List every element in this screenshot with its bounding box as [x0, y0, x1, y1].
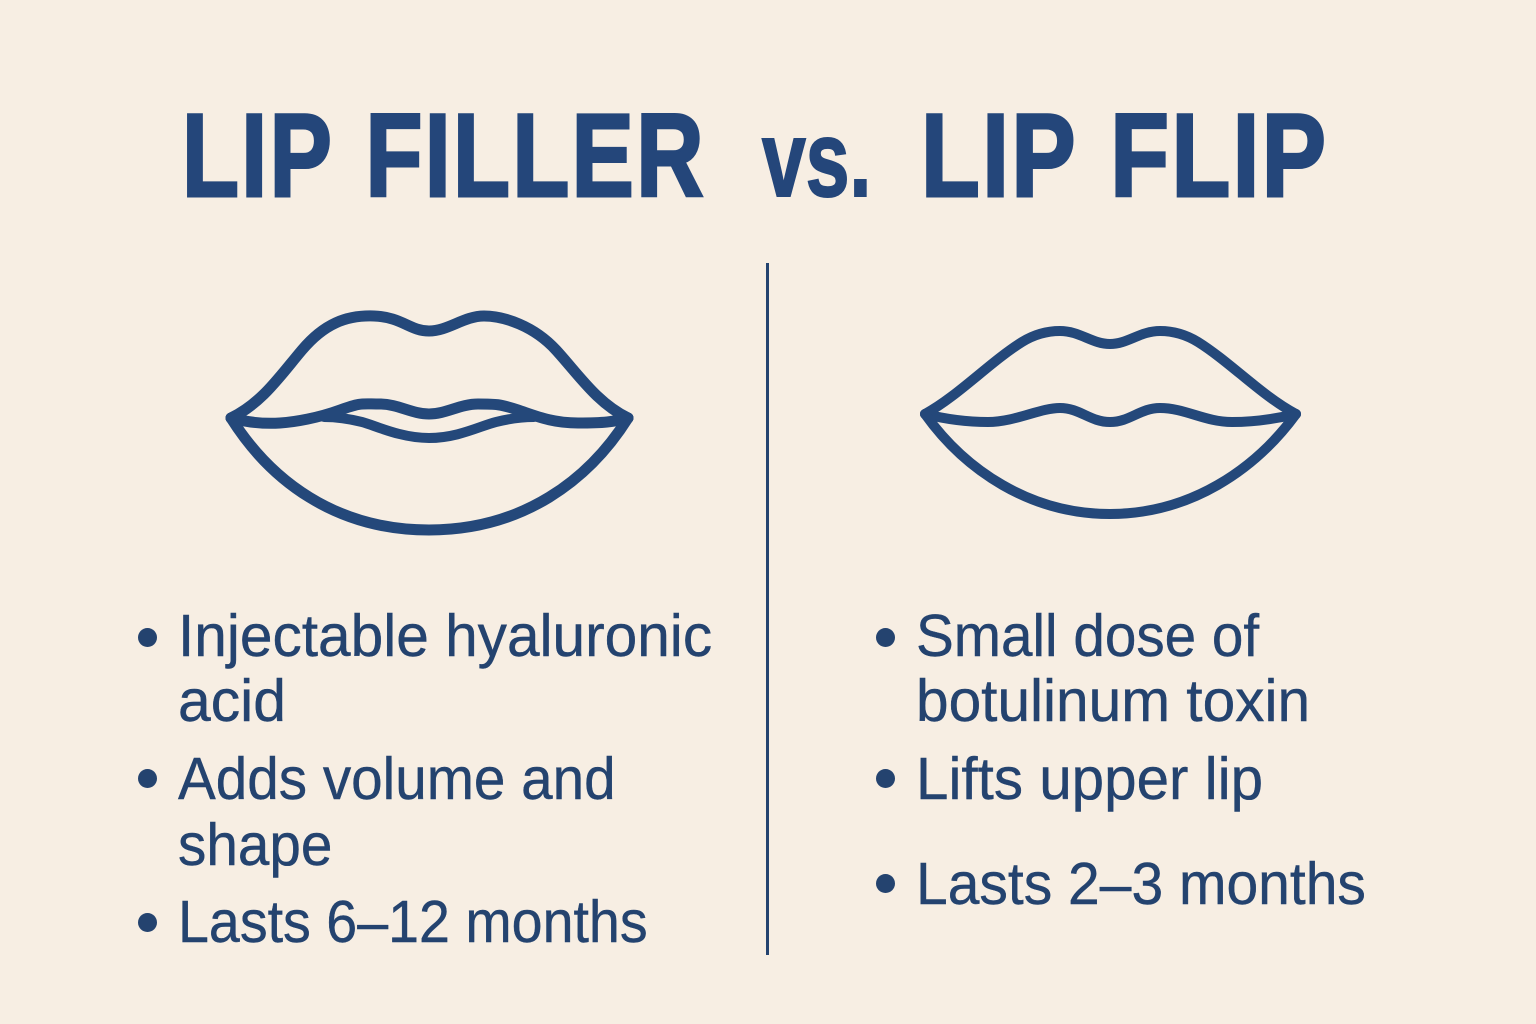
- bullet: adds volume and shape: [138, 746, 616, 878]
- bullet: small dose of botulinum toxin: [876, 603, 1310, 734]
- icon: full lips (filler): [226, 310, 634, 536]
- bullet: adds volume and shape: shape: [178, 812, 332, 878]
- heading: lip flip: LIP FLIP: [921, 90, 1328, 222]
- bullet: lasts 2-3 months: Lasts 2–3 months: [916, 851, 1366, 917]
- bullet: lifts upper lip: Lifts upper lip: [916, 746, 1263, 812]
- center divider: [766, 263, 769, 955]
- bullet: small dose of botulinum toxin: Small dose of: [916, 603, 1259, 669]
- bullet: lasts 6-12 months: Lasts 6–12 months: [178, 889, 648, 955]
- panel: filler bullets: [138, 603, 712, 955]
- title: [182, 90, 1328, 222]
- heading: lip filler: LIP FILLER: [182, 90, 706, 222]
- icon: flipped lips: [920, 326, 1301, 519]
- bullet: adds volume and shape: Adds volume and: [178, 746, 616, 812]
- bullet: injectable hyaluronic acid: [138, 603, 712, 734]
- panel: flip bullets: [876, 603, 1366, 917]
- bullet: small dose of botulinum toxin: botulinum toxin: [916, 668, 1310, 734]
- bullet: injectable hyaluronic acid: acid: [178, 668, 286, 734]
- heading: vs.: vs.: [762, 98, 871, 219]
- bullet: injectable hyaluronic acid: Injectable hyaluronic: [178, 603, 712, 669]
